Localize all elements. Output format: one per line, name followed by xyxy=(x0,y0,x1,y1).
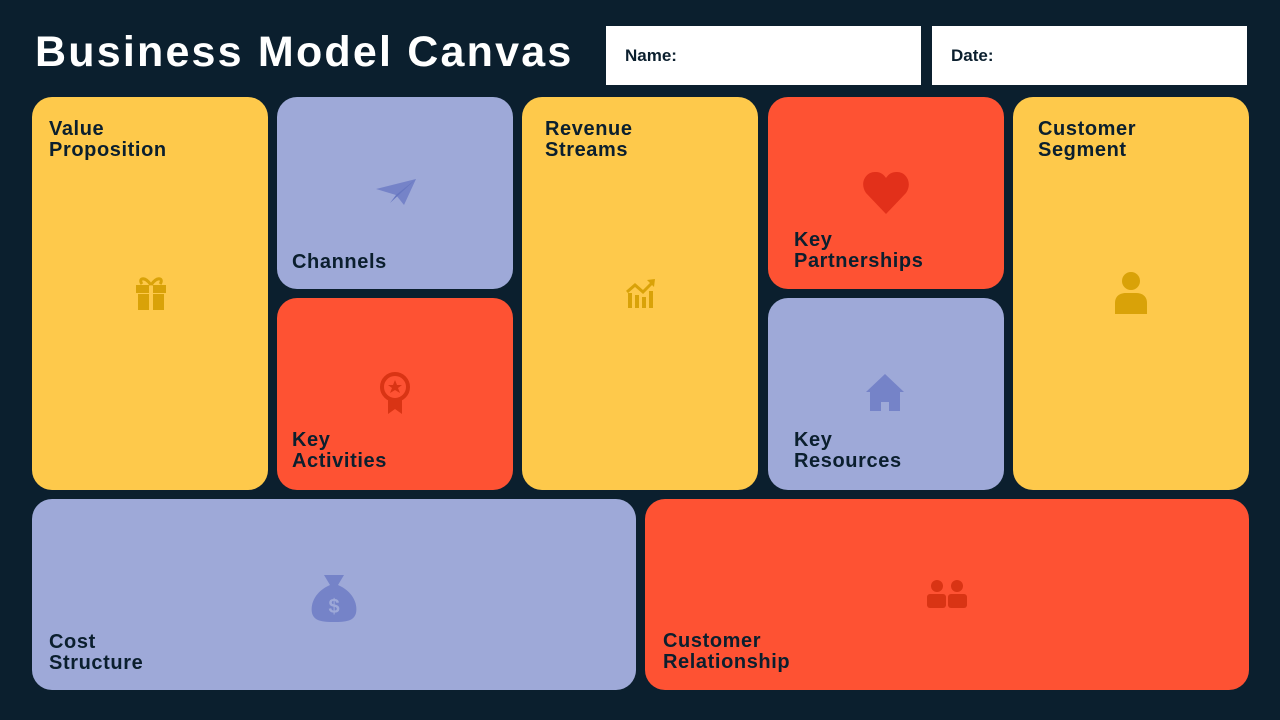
date field: Date: xyxy=(951,46,994,65)
icon: people xyxy=(927,580,967,608)
icon: paper plane xyxy=(376,179,416,205)
label: cost structure: Cost xyxy=(49,631,96,653)
panel: key activities xyxy=(277,298,513,490)
panel: channels xyxy=(277,97,513,289)
label: key partnerships: Key xyxy=(794,229,832,251)
label: channels: Channels xyxy=(292,251,387,273)
label: key partnerships xyxy=(794,229,923,272)
icon: award xyxy=(380,372,410,414)
panel: customer relationship xyxy=(645,499,1249,690)
label: revenue streams: Revenue xyxy=(545,118,633,140)
icon: house xyxy=(866,374,904,411)
label: key partnerships: Partnerships xyxy=(794,250,923,272)
label: value proposition xyxy=(49,118,167,161)
label: key activities: Activities xyxy=(292,450,387,472)
panel: cost structure xyxy=(32,499,636,690)
panel: customer segment xyxy=(1013,97,1249,490)
panel: key partnerships xyxy=(768,97,1004,289)
label: value proposition: Value xyxy=(49,118,104,140)
icon: gift xyxy=(136,277,166,310)
label: key resources: Key xyxy=(794,429,832,451)
name field xyxy=(606,26,921,85)
panel: value proposition xyxy=(32,97,268,490)
icon: money bag xyxy=(312,575,356,622)
title: Business Model Canvas xyxy=(35,28,573,76)
label: value proposition: Proposition xyxy=(49,139,167,161)
icon: heart xyxy=(863,172,909,214)
label: customer relationship xyxy=(663,630,790,673)
date field xyxy=(932,26,1247,85)
label: customer segment: Customer xyxy=(1038,118,1136,140)
label: key activities: Key xyxy=(292,429,330,451)
label: key resources xyxy=(794,429,902,472)
panel: key resources xyxy=(768,298,1004,490)
label: revenue streams: Streams xyxy=(545,139,628,161)
label: customer relationship: Customer xyxy=(663,630,761,652)
label: key resources: Resources xyxy=(794,450,902,472)
label: revenue streams xyxy=(545,118,633,161)
label: customer segment: Segment xyxy=(1038,139,1127,161)
panel: revenue streams xyxy=(522,97,758,490)
icon: person xyxy=(1115,272,1147,314)
label: cost structure xyxy=(49,631,143,674)
icon: chart xyxy=(626,279,655,308)
icon: money bag: $ xyxy=(328,596,340,618)
label: key activities xyxy=(292,429,387,472)
label: customer segment xyxy=(1038,118,1136,161)
name field: Name: xyxy=(625,46,677,65)
label: cost structure: Structure xyxy=(49,652,143,674)
label: customer relationship: Relationship xyxy=(663,651,790,673)
